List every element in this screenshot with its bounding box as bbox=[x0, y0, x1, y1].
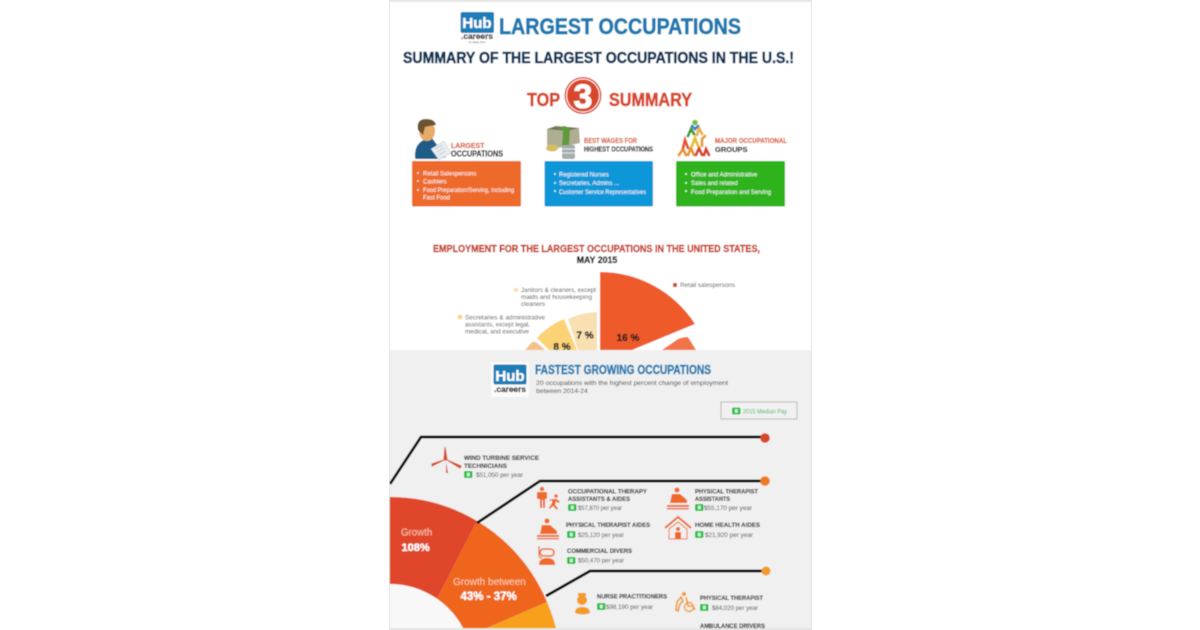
legend: janitors: maids and housekeeping bbox=[521, 294, 592, 301]
heading: best wages: HIGHEST OCCUPATIONS bbox=[584, 146, 653, 154]
item: physical therapist: PHYSICAL THERAPIST bbox=[700, 595, 763, 602]
page frame bbox=[389, 0, 812, 630]
item: nurse practitioners: $98,190 per year bbox=[606, 604, 653, 611]
logo: hub careers header: for happy hires bbox=[469, 41, 486, 44]
panel: blue list: Registered Nurses bbox=[559, 172, 609, 178]
growth arcs chart: 108% bbox=[402, 542, 430, 554]
legend: janitors: cleaners bbox=[521, 301, 546, 308]
chart heading: MAY 2015 bbox=[577, 255, 617, 265]
section description: between 2014-24 bbox=[536, 388, 588, 395]
title: LARGEST OCCUPATIONS bbox=[499, 14, 741, 39]
item: wind turbine technicians bbox=[432, 447, 540, 479]
item: physical therapist assistants bbox=[667, 488, 758, 512]
item: physical therapist bbox=[676, 592, 763, 612]
panel: green list: Food Preparation and Serving bbox=[691, 190, 771, 196]
item: physical therapist aides: $25,120 per year bbox=[578, 532, 624, 539]
pie chart: 7 % bbox=[576, 330, 594, 342]
heading: best wages: BEST WAGES FOR bbox=[584, 138, 637, 145]
panel: blue list bbox=[544, 161, 653, 206]
item: home health aides: $21,920 per year bbox=[705, 532, 753, 539]
legend: janitors: Janitors & cleaners, except bbox=[521, 287, 596, 294]
icon: money stack bbox=[546, 126, 580, 159]
pie chart: 8 % bbox=[553, 342, 571, 353]
item: physical therapist assistants: PHYSICAL THERAPIST bbox=[695, 488, 758, 496]
legend: median pay bbox=[721, 402, 797, 419]
item: commercial divers bbox=[539, 546, 633, 565]
panel: green list bbox=[676, 161, 785, 206]
logo: hub careers section: .careers bbox=[494, 385, 527, 394]
icon: person with document bbox=[415, 119, 451, 160]
section description: 20 occupations with the highest percent change of employment bbox=[536, 380, 728, 387]
legend: secretaries bbox=[458, 314, 545, 336]
subtitle: SUMMARY OF THE LARGEST OCCUPATIONS IN THE U.S.! bbox=[403, 50, 794, 67]
item: occupational therapy assistants: $57,870 per year bbox=[578, 505, 622, 512]
heading: top 3 summary: SUMMARY bbox=[609, 90, 692, 110]
heading: largest occupations: LARGEST bbox=[451, 143, 485, 150]
panel: blue list: Secretaries, Admins ... bbox=[559, 181, 619, 187]
growth arcs chart: Growth between bbox=[453, 577, 526, 588]
heading: top 3 summary bbox=[527, 77, 692, 116]
growth arcs chart: Growth bbox=[401, 528, 432, 538]
logo: hub careers header: .careers bbox=[461, 32, 494, 41]
connector line 2 bbox=[477, 476, 770, 523]
item: ambulance drivers: AMBULANCE DRIVERS bbox=[700, 623, 766, 630]
item: physical therapist: $84,020 per year bbox=[712, 605, 758, 612]
item: physical therapist aides bbox=[537, 518, 651, 540]
panel: largest occupations bbox=[390, 2, 811, 353]
item: commercial divers: COMMERCIAL DIVERS bbox=[567, 548, 633, 555]
item: physical therapist aides: PHYSICAL THERAPIST AIDES bbox=[566, 522, 651, 529]
legend: secretaries: assistants, except legal, bbox=[465, 322, 530, 328]
connector line 1 bbox=[390, 433, 770, 484]
item: nurse practitioners bbox=[575, 593, 668, 614]
legend: secretaries: medical, and executive bbox=[465, 328, 529, 336]
panel: orange list: Cashiers bbox=[423, 180, 447, 186]
chart heading bbox=[433, 243, 760, 265]
logo: hub careers header bbox=[460, 12, 494, 44]
panel: green list: Sales and related bbox=[691, 181, 738, 187]
pie chart: 16 % bbox=[617, 333, 640, 344]
legend: secretaries: Secretaries & administrative bbox=[465, 314, 545, 322]
section description bbox=[536, 380, 728, 395]
panel: orange list: Retail Salespersons bbox=[423, 172, 476, 178]
connector line 3 bbox=[546, 566, 770, 596]
item: occupational therapy assistants bbox=[537, 487, 648, 512]
item: occupational therapy assistants: OCCUPATIONAL THERAPY bbox=[568, 488, 648, 496]
item: wind turbine technicians: TECHNICIANS bbox=[464, 463, 508, 470]
logo: hub careers section: Hub bbox=[495, 368, 525, 385]
heading: largest occupations: OCCUPATIONS bbox=[451, 150, 504, 158]
panel: green list: Office and Administrative bbox=[691, 172, 758, 178]
pie chart bbox=[525, 272, 696, 353]
heading: top 3 summary: 3 bbox=[574, 78, 592, 116]
item: wind turbine technicians: WIND TURBINE SERVICE bbox=[464, 455, 540, 462]
heading: best wages bbox=[584, 138, 653, 154]
logo: hub careers header: Hub bbox=[462, 15, 492, 32]
legend: janitors bbox=[514, 287, 596, 308]
chart heading: EMPLOYMENT FOR THE LARGEST OCCUPATIONS IN THE UNITED STATES, bbox=[433, 243, 760, 255]
heading: largest occupations bbox=[451, 143, 504, 158]
icon: people pyramid bbox=[679, 121, 709, 155]
item: nurse practitioners: NURSE PRACTITIONERS bbox=[597, 594, 668, 600]
logo: hub careers section bbox=[491, 362, 529, 397]
legend: median pay: 2015 Median Pay bbox=[743, 408, 788, 416]
heading: top 3 summary: TOP bbox=[527, 90, 560, 110]
item: commercial divers: $50,470 per year bbox=[578, 558, 624, 564]
item: home health aides bbox=[665, 517, 761, 539]
panel: orange list: Fast Food bbox=[423, 196, 450, 202]
item: home health aides: HOME HEALTH AIDES bbox=[695, 522, 761, 529]
panel: fastest growing occupations bbox=[390, 350, 811, 630]
panel: orange list: Food Preparation/Serving, Including bbox=[423, 188, 514, 194]
heading: major occupational groups bbox=[715, 138, 788, 154]
item: occupational therapy assistants: ASSISTANTS & AIDES bbox=[568, 496, 631, 503]
growth arcs chart bbox=[390, 497, 556, 628]
panel: orange list bbox=[412, 161, 521, 206]
item: physical therapist assistants: ASSISTANTS bbox=[695, 496, 731, 503]
growth arcs chart: 43% - 37% bbox=[460, 591, 517, 603]
heading: major occupational groups: GROUPS bbox=[715, 145, 748, 154]
panel: blue list: Customer Service Representatives bbox=[559, 190, 646, 196]
heading: major occupational groups: MAJOR OCCUPATIONAL bbox=[715, 138, 788, 145]
item: physical therapist assistants: $55,170 per year bbox=[704, 505, 752, 512]
legend: retail salespersons: Retail salespersons bbox=[680, 282, 736, 289]
item: wind turbine technicians: $51,050 per year bbox=[476, 472, 523, 479]
section title: FASTEST GROWING OCCUPATIONS bbox=[535, 363, 711, 377]
